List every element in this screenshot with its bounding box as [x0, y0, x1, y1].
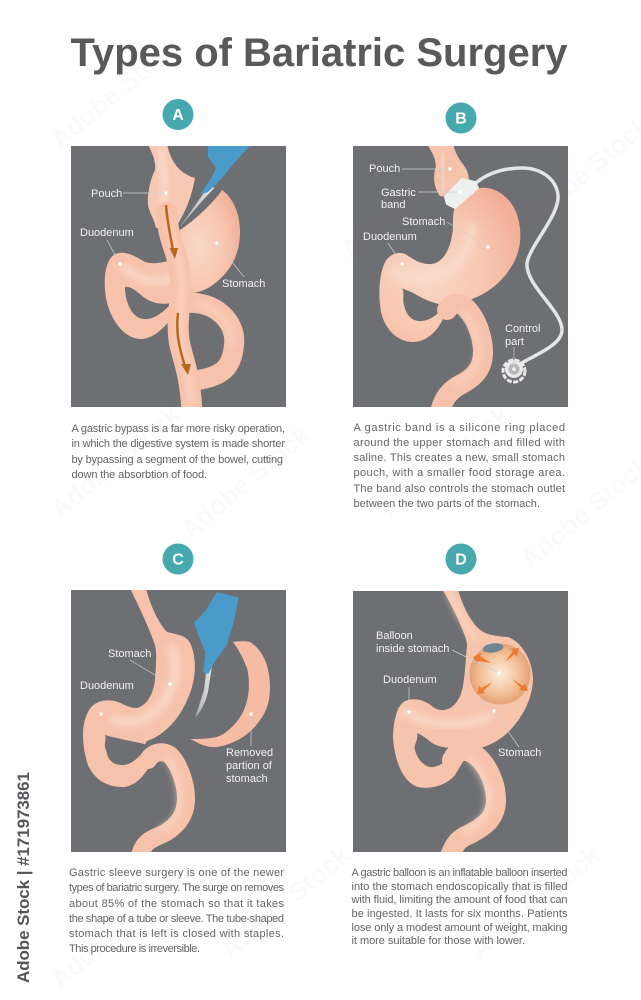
label: Stomach [108, 648, 172, 686]
title: Types of Bariatric Surgery [70, 31, 568, 75]
illustration: bypass anatomy [105, 144, 240, 412]
text block C: stomach that is left is closed with staples. [69, 928, 284, 940]
text block D: lose only a modest amount of weight, making [352, 922, 568, 934]
label: Gastric band [381, 187, 462, 211]
text block A: down the absorbtion of food. [72, 469, 207, 481]
watermark: Adobe Stock [335, 139, 476, 265]
panel B: gastric band [353, 144, 568, 412]
label: Removed portion of stomach: Removed [226, 747, 273, 759]
label: Duodenum [363, 231, 417, 266]
label: Duodenum [80, 227, 134, 266]
text block C: about 85% of the stomach so that it takes [69, 898, 284, 910]
badge B: B [455, 110, 467, 128]
illustration: sleeve anatomy [83, 588, 195, 856]
text block D [350, 867, 568, 947]
label: Stomach [215, 241, 265, 290]
badge D [446, 544, 476, 574]
text block B: pouch, with a smaller food storage area. [354, 467, 565, 479]
label: Stomach: Stomach [222, 278, 265, 290]
text block D: with fluid, limiting the amount of food that can [350, 894, 568, 906]
badge D: D [455, 552, 467, 568]
text block B: around the upper stomach and filled with [354, 437, 565, 449]
icon: silicone tube [477, 168, 562, 365]
text block C: This procedure is irreversible. [69, 943, 200, 955]
shape: removed portion of stomach [190, 641, 270, 747]
watermark: Adobe Stock [45, 869, 186, 995]
text block A: A gastric bypass is a far more risky operation, [72, 423, 285, 435]
icon: balloon [470, 642, 530, 704]
watermark: Adobe Stock [175, 419, 316, 545]
watermark: Adobe Stock [215, 839, 356, 965]
badge C [162, 544, 194, 574]
icon: control port [503, 360, 525, 382]
label: Removed portion of stomach: stomach [226, 773, 268, 785]
watermark: Adobe Stock [465, 839, 606, 965]
text block C: Gastric sleeve surgery is one of the newer [69, 867, 284, 879]
panel A: gastric bypass [71, 144, 286, 412]
icon: gloved hand with scissors [195, 593, 238, 718]
illustration: band anatomy [379, 144, 520, 412]
label: Stomach: Stomach [498, 747, 541, 759]
badge C: C [172, 552, 184, 568]
text block A: in which the digestive system is made shorter [72, 438, 285, 450]
label: Stomach [492, 709, 541, 759]
label: Duodenum: Duodenum [383, 674, 437, 686]
text block B [354, 422, 565, 510]
text block B: between the two parts of the stomach. [354, 498, 540, 510]
label: Stomach: Stomach [108, 648, 151, 660]
watermark: Adobe Stock [45, 399, 186, 525]
label: Control part: Control [505, 323, 540, 335]
label: Duodenum: Duodenum [80, 227, 134, 239]
label: Removed portion of stomach [226, 712, 273, 785]
text block D: be ingested. It lasts for six months. Patients [352, 908, 568, 920]
label: Control part [505, 323, 540, 369]
watermark: Adobe Stock [45, 29, 186, 155]
icon: gloved hand with scissors [179, 146, 250, 228]
illustration: balloon anatomy [393, 589, 533, 856]
panel D: gastric balloon [353, 589, 568, 856]
label: Gastric band: band [381, 199, 405, 211]
label: Duodenum: Duodenum [363, 231, 417, 243]
label: Duodenum [80, 680, 134, 716]
arrows: food path [166, 205, 191, 375]
label: Pouch: Pouch [91, 188, 122, 200]
text block D: it more suitable for those with lower. [352, 935, 525, 947]
badge A [162, 99, 194, 130]
label: Balloon inside stomach: Balloon [376, 630, 413, 642]
text block C [69, 867, 284, 955]
label: Gastric band: Gastric [381, 187, 416, 199]
text block B: The band also controls the stomach outlet [354, 483, 565, 495]
icon: gastric band [445, 179, 478, 208]
label: Pouch [369, 163, 452, 175]
watermark: Adobe Stock [375, 399, 516, 525]
arrows: balloon expansion [473, 648, 528, 694]
label: Balloon inside stomach [376, 630, 501, 675]
label: Pouch: Pouch [369, 163, 400, 175]
text block D: into the stomach endoscopically that is filled [352, 881, 568, 893]
text block B: A gastric band is a silicone ring placed [354, 422, 565, 434]
text block A [72, 423, 285, 481]
label: Control part: part [505, 336, 524, 348]
panel C: gastric sleeve [71, 588, 286, 856]
text block C: the shape of a tube or sleeve. The tube-shaped [69, 913, 284, 925]
text block D: A gastric balloon is an inflatable balloon inserted [352, 867, 568, 879]
text block C: types of bariatric surgery. The surge on removes [69, 882, 284, 894]
vertical stock credit: Adobe Stock | #171973861 [14, 772, 33, 983]
badge B [446, 102, 476, 134]
label: Stomach [402, 216, 490, 249]
label: Removed portion of stomach: partion of [226, 760, 273, 772]
text block B: saline. This creates a new, small stomach [354, 452, 565, 464]
text block A: by bypassing a segment of the bowel, cutting [72, 454, 283, 466]
label: Balloon inside stomach: inside stomach [376, 643, 449, 655]
label: Duodenum: Duodenum [80, 680, 134, 692]
label: Duodenum [383, 674, 437, 714]
label: Stomach: Stomach [402, 216, 445, 228]
label: Pouch [91, 188, 168, 200]
badge A: A [172, 107, 184, 124]
